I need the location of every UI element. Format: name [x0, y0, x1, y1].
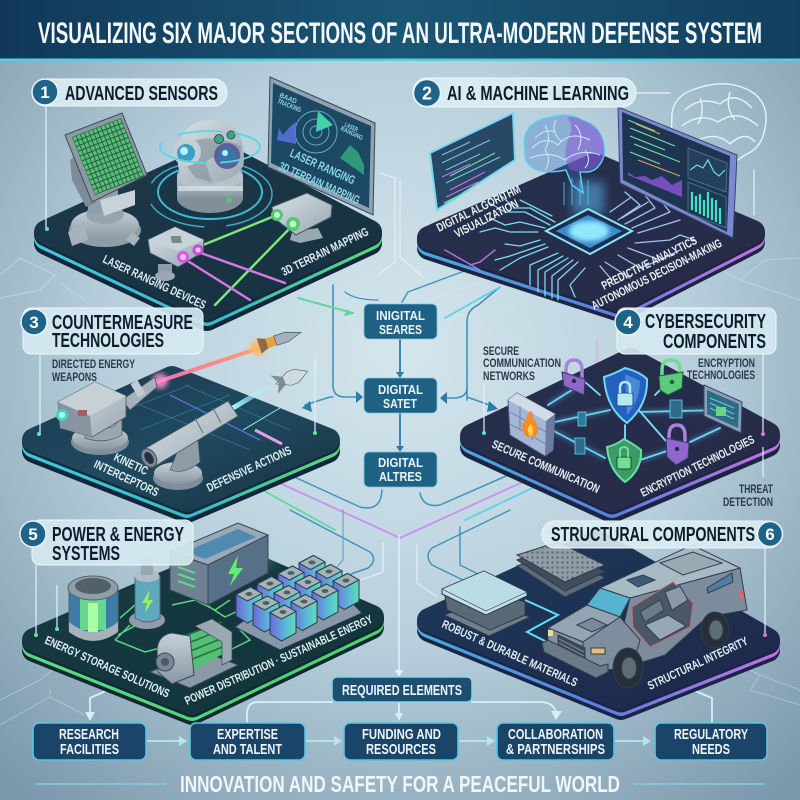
- icon: phased array radar panel: [65, 113, 147, 247]
- heading: 6 structural components: 6: [765, 525, 775, 544]
- annotation: threat detection: THREAT: [739, 482, 773, 496]
- label: visualization: VISUALIZATION: [452, 196, 521, 241]
- screen text: BAAD: [278, 92, 298, 106]
- center node: digital satet: SATET: [383, 396, 417, 411]
- heading: 5 power and energy systems: POWER & ENERGY: [52, 524, 184, 546]
- platform labels: structural: [440, 617, 750, 693]
- icon: green shield: [607, 439, 641, 482]
- label: robust and durable materials: ROBUST & DURABLE MATERIALS: [440, 617, 580, 690]
- platform labels: countermeasure: [92, 443, 294, 499]
- required elements box: REQUIRED ELEMENTS: [342, 682, 462, 699]
- center node: digital satet: [364, 378, 437, 413]
- label: power distribution sustainable energy: POWER DISTRIBUTION · SUSTAINABLE ENERGY: [183, 612, 375, 708]
- icon: central processor chip: [546, 209, 632, 254]
- heading: 5 power and energy systems: 5: [28, 525, 38, 544]
- center node: digital satet: DIGITAL: [378, 382, 423, 397]
- icon: laser beams: [183, 215, 293, 305]
- screen text: [276, 92, 364, 207]
- requirement: funding and resources: [344, 723, 458, 760]
- annotation: encryption technologies: [687, 356, 755, 382]
- center node: inigital seares: [364, 304, 437, 339]
- icon: interceptor beam: [233, 380, 280, 408]
- label: predictive analytics: PREDICTIVE ANALYTICS: [599, 233, 699, 293]
- requirement: research facilities: RESEARCH: [59, 726, 119, 743]
- requirement: regulatory needs: NEEDS: [692, 741, 730, 758]
- panel: countermeasure platform: [34, 378, 328, 511]
- label: interceptors: INTERCEPTORS: [92, 457, 161, 499]
- label: structural integrity: STRUCTURAL INTEGRITY: [645, 634, 750, 693]
- icon: energy circuit traces: [115, 600, 250, 652]
- connector arrowheads: [85, 309, 562, 721]
- platform labels: cybersecurity: [490, 432, 757, 500]
- screen text: LASER: [343, 121, 359, 134]
- icon: large translucent brain: [672, 84, 766, 162]
- panel: AI and machine learning platform: [429, 165, 753, 310]
- label: kinetic: KINETIC: [112, 450, 151, 478]
- arrows between requirements: [147, 736, 651, 746]
- annotation: encryption technologies: ENCRYPTION: [698, 356, 755, 370]
- icon: kinetic interceptor tube: [138, 401, 238, 490]
- icon: main blue shield: [604, 368, 647, 423]
- icon: directed energy turret: [56, 377, 157, 455]
- icon: dome camera: [148, 119, 272, 227]
- heading: 5 power and energy systems: SYSTEMS: [52, 543, 120, 565]
- heading: 4 cybersecurity components: 4: [623, 313, 633, 332]
- heading: 3 countermeasure technologies: [21, 308, 203, 354]
- icon: energy storage reactor: [68, 576, 118, 641]
- center node: digital altres: DIGITAL: [378, 455, 423, 470]
- panel: data monitor: [268, 77, 375, 215]
- panel: structural components platform: [429, 542, 768, 708]
- icon: purple lock: [562, 360, 585, 395]
- screen text: RANGING: [339, 125, 364, 142]
- annotation: secure communication networks: SECURE: [483, 344, 519, 358]
- icon: incoming missile orange: [257, 325, 303, 354]
- icon: laser ranging device right: [271, 193, 332, 243]
- requirement: research facilities: FACILITIES: [60, 741, 119, 758]
- screen text: 3D TERRAIN MAPPING: [277, 159, 362, 207]
- icon: encrypted terminal: [704, 385, 742, 433]
- platform label: laser ranging devices: LASER RANGING DEVICES: [101, 252, 208, 312]
- heading: 3 countermeasure technologies: TECHNOLOGIES: [52, 330, 164, 352]
- platform labels: AI: [434, 182, 724, 313]
- icon: armor plate stack back: [517, 542, 605, 597]
- icon: network links: [548, 382, 720, 460]
- annotation: directed energy weapons: DIRECTED ENERGY: [52, 357, 135, 371]
- panel: advanced sensors platform: [46, 113, 371, 319]
- icon: green lock: [659, 360, 683, 395]
- center node: inigital seares: SEARES: [379, 322, 422, 337]
- icon: power storage container: [170, 523, 268, 605]
- leader lines from headings: [34, 106, 767, 637]
- panel: analytics monitor: [618, 107, 737, 238]
- icon: incoming rocket silver: [270, 362, 311, 394]
- requirement: expertise and talent: AND TALENT: [213, 741, 282, 758]
- heading: 1 advanced sensors: [32, 79, 227, 106]
- annotation: secure communication networks: COMMUNICATION: [483, 356, 561, 370]
- requirement: research facilities: [33, 723, 146, 760]
- annotation: threat detection: DETECTION: [723, 495, 773, 509]
- annotation: threat detection: [723, 482, 773, 509]
- heading: 1 advanced sensors: ADVANCED SENSORS: [65, 83, 218, 105]
- panel: cybersecurity platform: [472, 360, 768, 511]
- requirement: regulatory needs: [655, 723, 767, 760]
- icon: second purple lock: [666, 425, 689, 465]
- screen text: LASER RANGING: [288, 146, 357, 187]
- requirement: collaboration and partnerships: & PARTNERSHIPS: [506, 741, 605, 758]
- label: defensive actions: DEFENSIVE ACTIONS: [204, 443, 294, 495]
- panel: power and energy platform: [34, 546, 372, 713]
- icon: armor plate stack front: [442, 571, 530, 636]
- requirement: expertise and talent: [190, 723, 305, 760]
- footer tagline: INNOVATION AND SAFETY FOR A PEACEFUL WORLD: [180, 771, 620, 797]
- heading: 2 AI and machine learning: 2: [422, 84, 432, 104]
- label: encryption technologies: ENCRYPTION TECHNOLOGIES: [638, 432, 757, 500]
- annotation: secure communication networks: [483, 344, 561, 383]
- heading: 5 power and energy systems: [20, 520, 193, 565]
- required elements box: [332, 677, 472, 702]
- requirement: funding and resources: FUNDING AND: [362, 726, 441, 743]
- heading: 3 countermeasure technologies: COUNTERMEASURE: [52, 312, 193, 334]
- requirement: collaboration and partnerships: [497, 723, 614, 760]
- icon: lightning battery cylinder: [129, 558, 165, 629]
- center node: digital altres: ALTRES: [379, 469, 422, 484]
- heading: 4 cybersecurity components: [615, 308, 776, 354]
- heading: 2 AI and machine learning: [413, 78, 636, 107]
- label: secure communication: SECURE COMMUNICATION: [490, 437, 602, 496]
- icon: directed energy laser beam: [152, 340, 266, 389]
- heading: 2 AI and machine learning: AI & MACHINE LEARNING: [447, 83, 629, 105]
- icon: battery array: [235, 556, 362, 650]
- icon: generator: [150, 619, 238, 688]
- icon: glowing brain above chip: [524, 115, 604, 205]
- requirement: regulatory needs: REGULATORY: [674, 726, 748, 743]
- requirement: collaboration and partnerships: COLLABORATION: [508, 726, 603, 743]
- label: autonomous decision making: AUTONOMOUS DECISION-MAKING: [589, 236, 724, 313]
- header banner: [0, 0, 800, 61]
- icon: holographic code window: [430, 113, 515, 210]
- annotation: directed energy weapons: [52, 357, 135, 384]
- annotation: encryption technologies: TECHNOLOGIES: [687, 368, 755, 382]
- platform label: 3d terrain mapping: 3D TERRAIN MAPPING: [279, 224, 371, 279]
- background connector lines: [0, 93, 800, 725]
- annotation: directed energy weapons: WEAPONS: [52, 370, 97, 384]
- center node: digital altres: [364, 452, 437, 487]
- label: energy storage solutions: ENERGY STORAGE SOLUTIONS: [43, 633, 172, 701]
- heading: 1 advanced sensors: 1: [40, 83, 50, 102]
- icon: laser ranging device left: [148, 227, 204, 281]
- icon: armored vehicle: [542, 545, 747, 688]
- screen text: TRACKING: [276, 98, 302, 114]
- icon: firewall: [508, 393, 555, 456]
- annotation: secure communication networks: NETWORKS: [483, 369, 535, 383]
- label: digital algorithm: DIGITAL ALGORITHM: [434, 182, 523, 235]
- icon: circuit traces: [445, 192, 695, 300]
- center node: inigital seares: INIGITAL: [376, 308, 425, 323]
- platform labels: power: [43, 612, 375, 708]
- requirement: expertise and talent: EXPERTISE: [217, 726, 278, 743]
- heading: 3 countermeasure technologies: 3: [29, 313, 39, 332]
- requirement: funding and resources: RESOURCES: [366, 741, 436, 758]
